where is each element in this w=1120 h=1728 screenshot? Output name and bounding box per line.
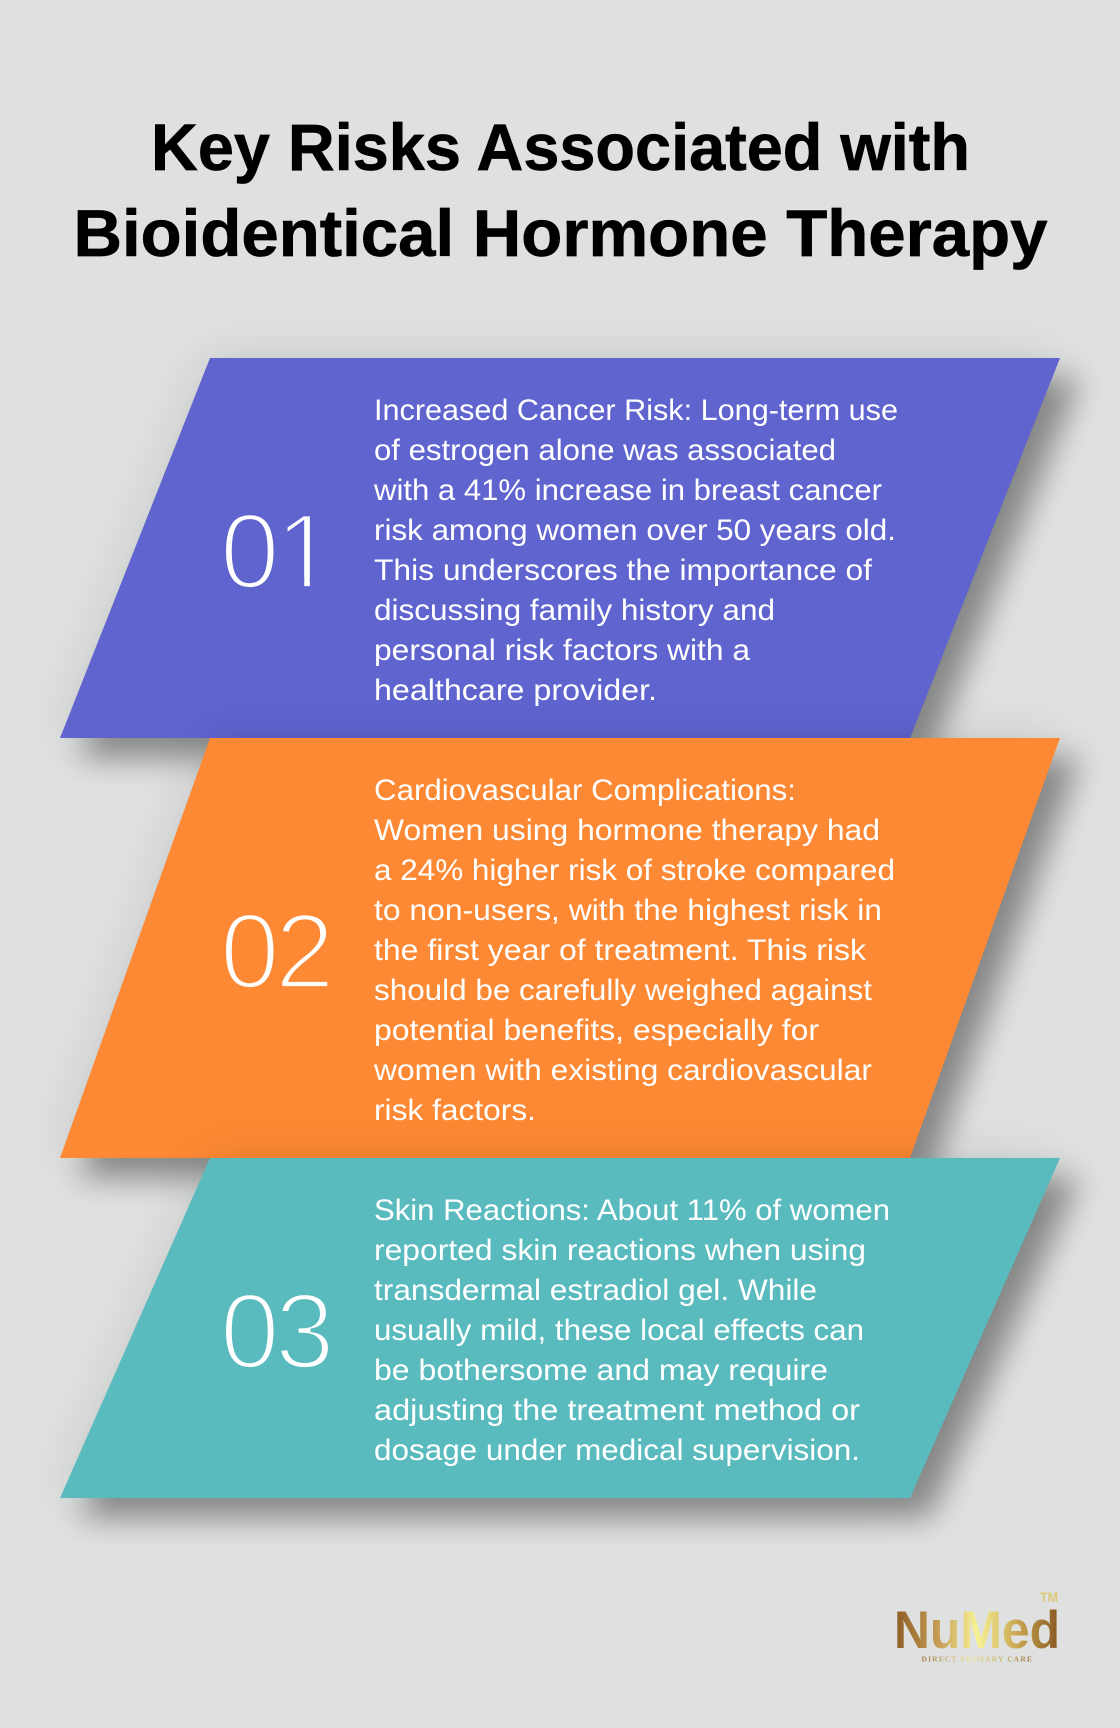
panel shape: purple parallelogram bbox=[60, 358, 1060, 738]
text block: skin reactions: adjusting the treatment method or bbox=[374, 1394, 860, 1427]
text block: skin reactions: reported skin reactions when using bbox=[374, 1234, 866, 1267]
text block: cancer risk: risk among women over 50 years old. bbox=[374, 514, 896, 547]
logo: NuMed: TM bbox=[1040, 1589, 1058, 1605]
text block: skin reactions: dosage under medical supervision. bbox=[374, 1434, 860, 1467]
text block: cancer risk: with a 41% increase in breast cancer bbox=[373, 474, 882, 507]
text block: cardiovascular: Women using hormone therapy had bbox=[374, 814, 880, 847]
text block: cardiovascular: the first year of treatment. This risk bbox=[374, 934, 866, 967]
text block: cancer risk bbox=[373, 394, 898, 707]
text block: cardiovascular: women with existing cardiovascular bbox=[373, 1054, 872, 1087]
panel: 01 increased cancer risk bbox=[60, 358, 1060, 738]
text block: skin reactions: be bothersome and may require bbox=[374, 1354, 828, 1387]
text block: skin reactions: transdermal estradiol gel. While bbox=[374, 1274, 817, 1307]
logo: NuMed: NuMed bbox=[894, 1601, 1060, 1660]
text block: cancer risk: personal risk factors with a bbox=[374, 634, 751, 667]
text block: cardiovascular: Cardiovascular Complications: bbox=[374, 774, 796, 807]
title bbox=[74, 110, 1048, 270]
text block: cancer risk: discussing family history and bbox=[374, 594, 775, 627]
text block: skin reactions: Skin Reactions: About 11% of women bbox=[374, 1194, 890, 1227]
text block: skin reactions: usually mild, these local effects can bbox=[374, 1314, 864, 1347]
text block: cardiovascular: should be carefully weighed against bbox=[374, 974, 872, 1007]
text block: skin reactions bbox=[374, 1194, 890, 1467]
number 01: 01 bbox=[220, 491, 335, 611]
logo: NuMed: DIRECT PRIMARY CARE bbox=[922, 1654, 1032, 1664]
panel shape: teal parallelogram bbox=[60, 1158, 1060, 1498]
text block: cardiovascular bbox=[373, 774, 895, 1127]
text block: cardiovascular: potential benefits, especially for bbox=[374, 1014, 819, 1047]
text block: cancer risk: of estrogen alone was associated bbox=[374, 434, 836, 467]
panel: 03 skin reactions bbox=[60, 1158, 1060, 1498]
number 03: 03 bbox=[220, 1271, 335, 1391]
title: Bioidentical Hormone Therapy bbox=[74, 196, 1048, 270]
number 02: 02 bbox=[220, 891, 335, 1011]
text block: cardiovascular: to non-users, with the highest risk in bbox=[374, 894, 882, 927]
text block: cancer risk: This underscores the importance of bbox=[374, 554, 873, 587]
text block: cardiovascular: risk factors. bbox=[374, 1094, 536, 1127]
text block: cancer risk: healthcare provider. bbox=[374, 674, 657, 707]
panel shape: orange parallelogram bbox=[60, 738, 1060, 1158]
title: Key Risks Associated with bbox=[151, 110, 970, 184]
panel: 02 cardiovascular complications bbox=[60, 738, 1060, 1158]
text block: cancer risk: Increased Cancer Risk: Long-term use bbox=[374, 394, 898, 427]
text block: cardiovascular: a 24% higher risk of stroke compared bbox=[374, 854, 895, 887]
